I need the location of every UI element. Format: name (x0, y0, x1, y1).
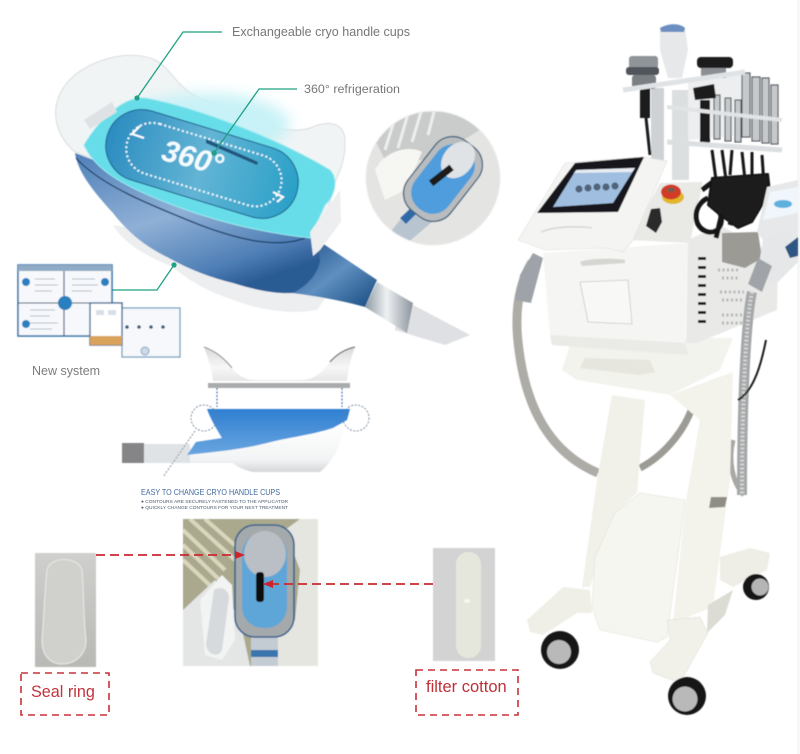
small screen controls (96, 310, 104, 315)
line (96, 554, 236, 556)
left leg (582, 395, 645, 587)
base tray (562, 338, 733, 395)
photo: seal ring (35, 553, 96, 667)
handle illustration (56, 55, 470, 345)
stripe lines (385, 112, 434, 150)
blue 360 pill (97, 101, 307, 227)
clear shelf 3 (667, 142, 782, 150)
black cord (738, 340, 766, 400)
dashed circle left (191, 405, 217, 431)
cable loop left (696, 198, 721, 232)
upper deck (630, 182, 703, 243)
orange strip (90, 336, 122, 345)
cable strands (712, 150, 764, 185)
side tablet graphic (774, 200, 792, 208)
label box: filter cotton (416, 670, 518, 715)
side perforations (718, 270, 746, 323)
silver ferrule (365, 282, 413, 333)
caption bullet 1: ● CONTOURS ARE SECURELY FASTENED TO THE APPLICATOR (141, 499, 289, 504)
white underside (113, 225, 345, 312)
callout: new system leader (112, 262, 177, 290)
applicator stem (392, 208, 432, 241)
inset circle: cup close-up (366, 111, 500, 245)
front handle (580, 259, 625, 266)
pad centre hole (464, 599, 470, 603)
transparent cup (56, 55, 345, 240)
silver dome (244, 531, 286, 577)
louvre stripes (183, 519, 238, 590)
main screen (18, 265, 112, 336)
screen header (574, 168, 635, 173)
mesh vent (707, 590, 733, 633)
side panel (686, 225, 778, 343)
inner cup (206, 588, 229, 655)
label: Seal ring (31, 683, 95, 701)
rack back post (672, 90, 689, 180)
cup rim left (204, 347, 232, 368)
hose collar (515, 253, 543, 303)
stem blue band (400, 208, 416, 224)
teal cooling plate (84, 98, 335, 238)
dashed box (21, 673, 109, 715)
wheel rear (743, 574, 769, 600)
black slot (256, 572, 264, 602)
caption bullet 2: ● QUICKLY CHANGE CONTOURS FOR YOUR NEXT TREATMENT (141, 505, 288, 510)
white backing (277, 518, 318, 666)
cable mass (708, 174, 770, 228)
cross dividers (18, 271, 112, 336)
white latch left (84, 102, 117, 129)
left hose (517, 262, 598, 473)
right hose loop (731, 440, 744, 495)
left foot (527, 587, 592, 635)
tablet lip highlight (541, 227, 592, 232)
emergency stop button (661, 184, 684, 204)
text placeholder rows (30, 279, 98, 329)
screen icons (575, 182, 619, 193)
dashed pointer (163, 431, 195, 477)
third screen (122, 308, 180, 357)
hose stub (122, 443, 144, 463)
electrode paddles (714, 73, 778, 144)
wheel front (668, 677, 706, 715)
cup rim right (330, 347, 355, 362)
applicator (757, 232, 798, 285)
label: new system: New system (32, 364, 100, 378)
cup top (204, 347, 355, 381)
hose highlight (144, 444, 190, 463)
lower lip (550, 335, 688, 355)
right hose (742, 292, 752, 495)
body front (543, 243, 688, 343)
hose fading out (395, 298, 470, 345)
software screens (18, 265, 180, 357)
side tablet (757, 180, 798, 252)
handle neck (292, 243, 377, 307)
clear shelf 2 (667, 107, 782, 120)
tablet bezel (537, 157, 644, 213)
leader line (214, 89, 297, 153)
dashed circle right (343, 405, 369, 431)
leader dot (211, 150, 217, 156)
blue body (75, 153, 320, 293)
third screen dots (125, 325, 165, 329)
arrowhead (235, 551, 245, 559)
second head (693, 84, 716, 145)
silver dome (440, 141, 476, 180)
head left top (629, 56, 658, 69)
right hose ribbing (742, 292, 752, 495)
callout: exchangeable cups (134, 25, 410, 101)
left hose rear (640, 405, 693, 468)
head left cable (646, 118, 650, 155)
ring outline (42, 560, 86, 664)
applicator frame (235, 525, 294, 637)
wand tip (660, 24, 685, 32)
360 degree mark: 360° (158, 134, 228, 183)
blue insert (187, 409, 350, 455)
black head (697, 57, 733, 68)
rotation arrow right (273, 192, 283, 202)
black cable bundle (696, 150, 770, 238)
rack column (651, 88, 664, 160)
photo: filter cotton (433, 548, 495, 661)
head left ring (626, 67, 659, 75)
striped background (370, 112, 480, 160)
dashed arrow: seal ring (96, 551, 245, 559)
silver collar (748, 258, 772, 292)
callout: 360 refrigeration (211, 84, 400, 156)
leader line (112, 265, 174, 290)
right leg (670, 372, 733, 623)
side vents (698, 257, 706, 323)
rack plate (688, 72, 745, 140)
head left lower (632, 75, 656, 89)
head left neck (640, 88, 650, 118)
tablet screen (553, 168, 635, 207)
tablet housing (518, 157, 667, 252)
tray shadow detail (580, 358, 655, 375)
rotation arrow left (132, 126, 144, 138)
cable curls (702, 178, 738, 238)
front recess (580, 280, 632, 324)
clear shelf 1 (623, 72, 745, 90)
small screen controls 2 (108, 310, 116, 315)
main title bar (18, 265, 112, 271)
mode buttons (22, 278, 109, 328)
motor cover (592, 493, 685, 642)
label: filter cotton (426, 678, 507, 696)
dashed box (416, 670, 518, 715)
handle cradle (722, 232, 762, 268)
dotted rotation path (120, 116, 288, 213)
glow above plate (120, 93, 290, 157)
diagram caption (141, 487, 289, 510)
stem band (251, 650, 278, 657)
leader line (137, 32, 222, 98)
rear foot (720, 548, 770, 587)
leader dot (134, 95, 140, 101)
white latch right (310, 190, 341, 256)
inset ring (366, 111, 500, 245)
key switch (646, 208, 662, 233)
arrowhead (263, 580, 273, 588)
dashed arrow: filter cotton (263, 580, 433, 588)
cotton pad (456, 552, 481, 658)
leader dot (171, 262, 177, 268)
label: Exchangeable cryo handle cups (232, 25, 410, 39)
leg dark strap (709, 497, 727, 508)
applicator frame (402, 135, 484, 223)
applicator stem (250, 637, 278, 666)
black head stem (701, 68, 726, 78)
photo: applicator (183, 519, 318, 666)
wheel left (541, 631, 579, 669)
white cup (200, 575, 235, 660)
label: 360° refrigeration (304, 84, 400, 96)
small screen (90, 303, 122, 345)
white cloth (375, 149, 422, 200)
applicator blue (785, 237, 798, 258)
wand handle (660, 25, 688, 78)
metal bar (208, 383, 350, 388)
side tablet screen (763, 187, 798, 220)
white base (160, 425, 345, 472)
dark rim line (76, 158, 310, 243)
front foot (650, 617, 708, 683)
applicator cavity (410, 144, 476, 214)
machine (515, 24, 798, 715)
slot in plate (206, 139, 258, 165)
exploded cup diagram (122, 347, 369, 477)
line (272, 583, 433, 585)
label box: seal ring (21, 673, 109, 715)
black slot (429, 165, 454, 186)
faint right edge strip (797, 0, 800, 754)
white panel (183, 580, 250, 666)
caption heading: EASY TO CHANGE CRYO HANDLE CUPS (141, 487, 280, 497)
cavity (242, 533, 287, 628)
alignment arrows (217, 388, 342, 407)
third screen footer button (141, 347, 149, 355)
